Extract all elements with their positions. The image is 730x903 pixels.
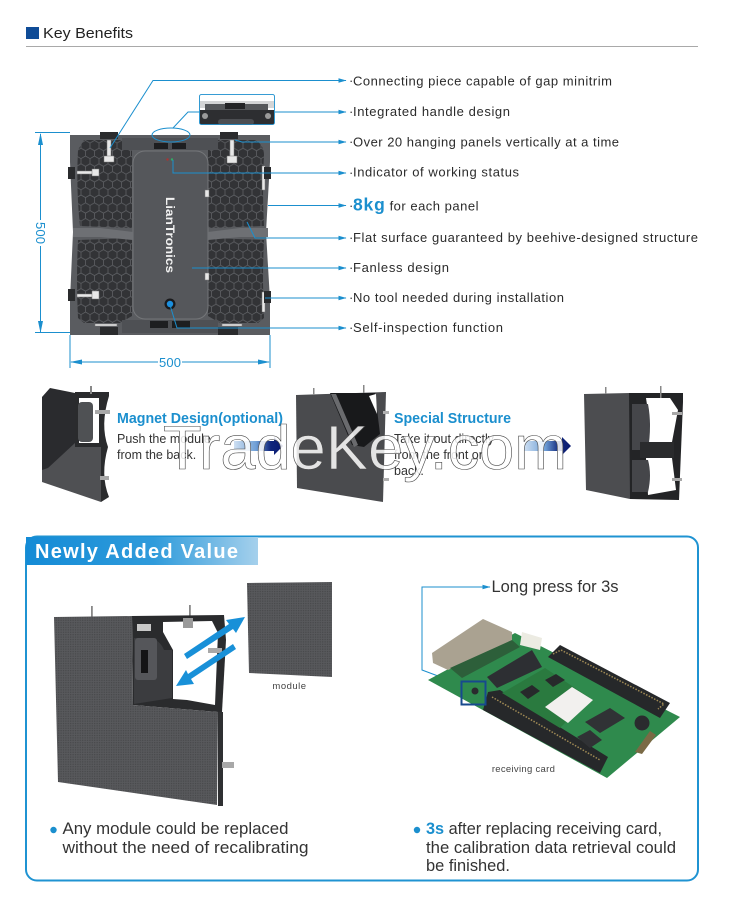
text block: magnet design: Push the module	[117, 432, 211, 446]
callout labels: Flat surface guaranteed by beehive-designed structure	[353, 230, 698, 245]
callout labels: ·	[349, 134, 353, 149]
cabinet body	[70, 135, 270, 335]
callout labels: ·	[349, 165, 353, 180]
section heading: Key Benefits	[26, 25, 698, 47]
callout labels: ·	[349, 104, 353, 119]
text block: special structure: Special Structure	[394, 411, 511, 427]
callout leader lines	[110, 80, 346, 328]
text block: special structure	[394, 411, 511, 478]
callout labels: Self-inspection function	[353, 320, 503, 335]
central control box	[133, 151, 208, 319]
text block: special structure: back.	[394, 464, 424, 478]
panel rear view diagram	[68, 132, 271, 335]
self inspection button	[164, 298, 176, 310]
callout labels: No tool needed during installation	[353, 290, 564, 305]
product photo: magnet door open	[42, 386, 110, 502]
text block: special structure: Take it out directly	[394, 432, 495, 446]
callout labels: ·	[349, 230, 353, 245]
handle close-up inset	[200, 94, 274, 125]
banner heading	[26, 537, 258, 565]
bullet text: 3s retrieval	[414, 820, 676, 875]
text block: special structure: from the front or	[394, 448, 483, 462]
dimension: width 500: 500	[159, 355, 181, 370]
indicator lights	[166, 158, 169, 161]
product photo: module removed	[584, 386, 683, 500]
callout: long press	[422, 578, 618, 688]
callout labels: Fanless design	[353, 260, 449, 275]
callout labels: Indicator of working status	[353, 164, 520, 180]
bullet text: any module	[50, 820, 309, 857]
dimension: height 500: 500	[33, 222, 48, 244]
cabinet with module removed	[54, 605, 234, 806]
loose LED module: module	[272, 681, 307, 692]
bullet text: 3s retrieval: be finished.	[426, 857, 510, 875]
callout labels: 8kg for each panel	[353, 194, 479, 214]
callout labels: ·	[349, 320, 353, 335]
loose LED module	[247, 582, 332, 692]
callout labels: ·	[349, 198, 353, 213]
highlight square	[462, 682, 486, 704]
callout labels: Connecting piece capable of gap minitrim	[353, 74, 612, 88]
bullet text: 3s retrieval: the calibration data retrieval could	[426, 839, 676, 857]
dimension: height 500	[33, 132, 70, 333]
arrow: step one to two	[234, 437, 283, 455]
arrow: step two to three	[524, 437, 571, 455]
callout labels: Integrated handle design	[353, 104, 510, 119]
honeycomb structure	[77, 140, 264, 323]
bullet text: any module: Any module could be replaced	[62, 820, 288, 838]
product photo: front service	[296, 385, 389, 502]
callout labels: Over 20 hanging panels vertically at a time	[353, 134, 619, 150]
callout labels: ·	[349, 73, 353, 88]
text block: magnet design: from the back.	[117, 448, 196, 462]
callout: long press: Long press for 3s	[492, 578, 618, 596]
panel: newly added value	[26, 536, 698, 880]
callout labels: ·	[349, 260, 353, 275]
dimension: width 500	[70, 335, 270, 370]
text block: magnet design	[117, 411, 283, 462]
brand label: LianTronics	[163, 197, 175, 273]
callout labels: ·	[349, 290, 353, 305]
banner heading: Newly Added Value	[35, 541, 238, 563]
section heading: Key Benefits: Key Benefits	[43, 25, 133, 42]
bullet text: 3s retrieval: 3s after replacing receiving card,	[426, 820, 662, 838]
callout labels	[349, 73, 698, 335]
bullet text: any module: without the need of recalibrating	[61, 839, 308, 857]
text block: magnet design: Magnet Design(optional)	[117, 411, 283, 427]
receiving card photo	[428, 619, 680, 778]
receiving card photo: receiving card	[492, 764, 555, 775]
cross straps	[73, 228, 133, 240]
connecting pieces	[77, 140, 265, 326]
watermark: TradeKey.com	[163, 414, 567, 483]
double arrows: remove and insert	[176, 617, 245, 686]
